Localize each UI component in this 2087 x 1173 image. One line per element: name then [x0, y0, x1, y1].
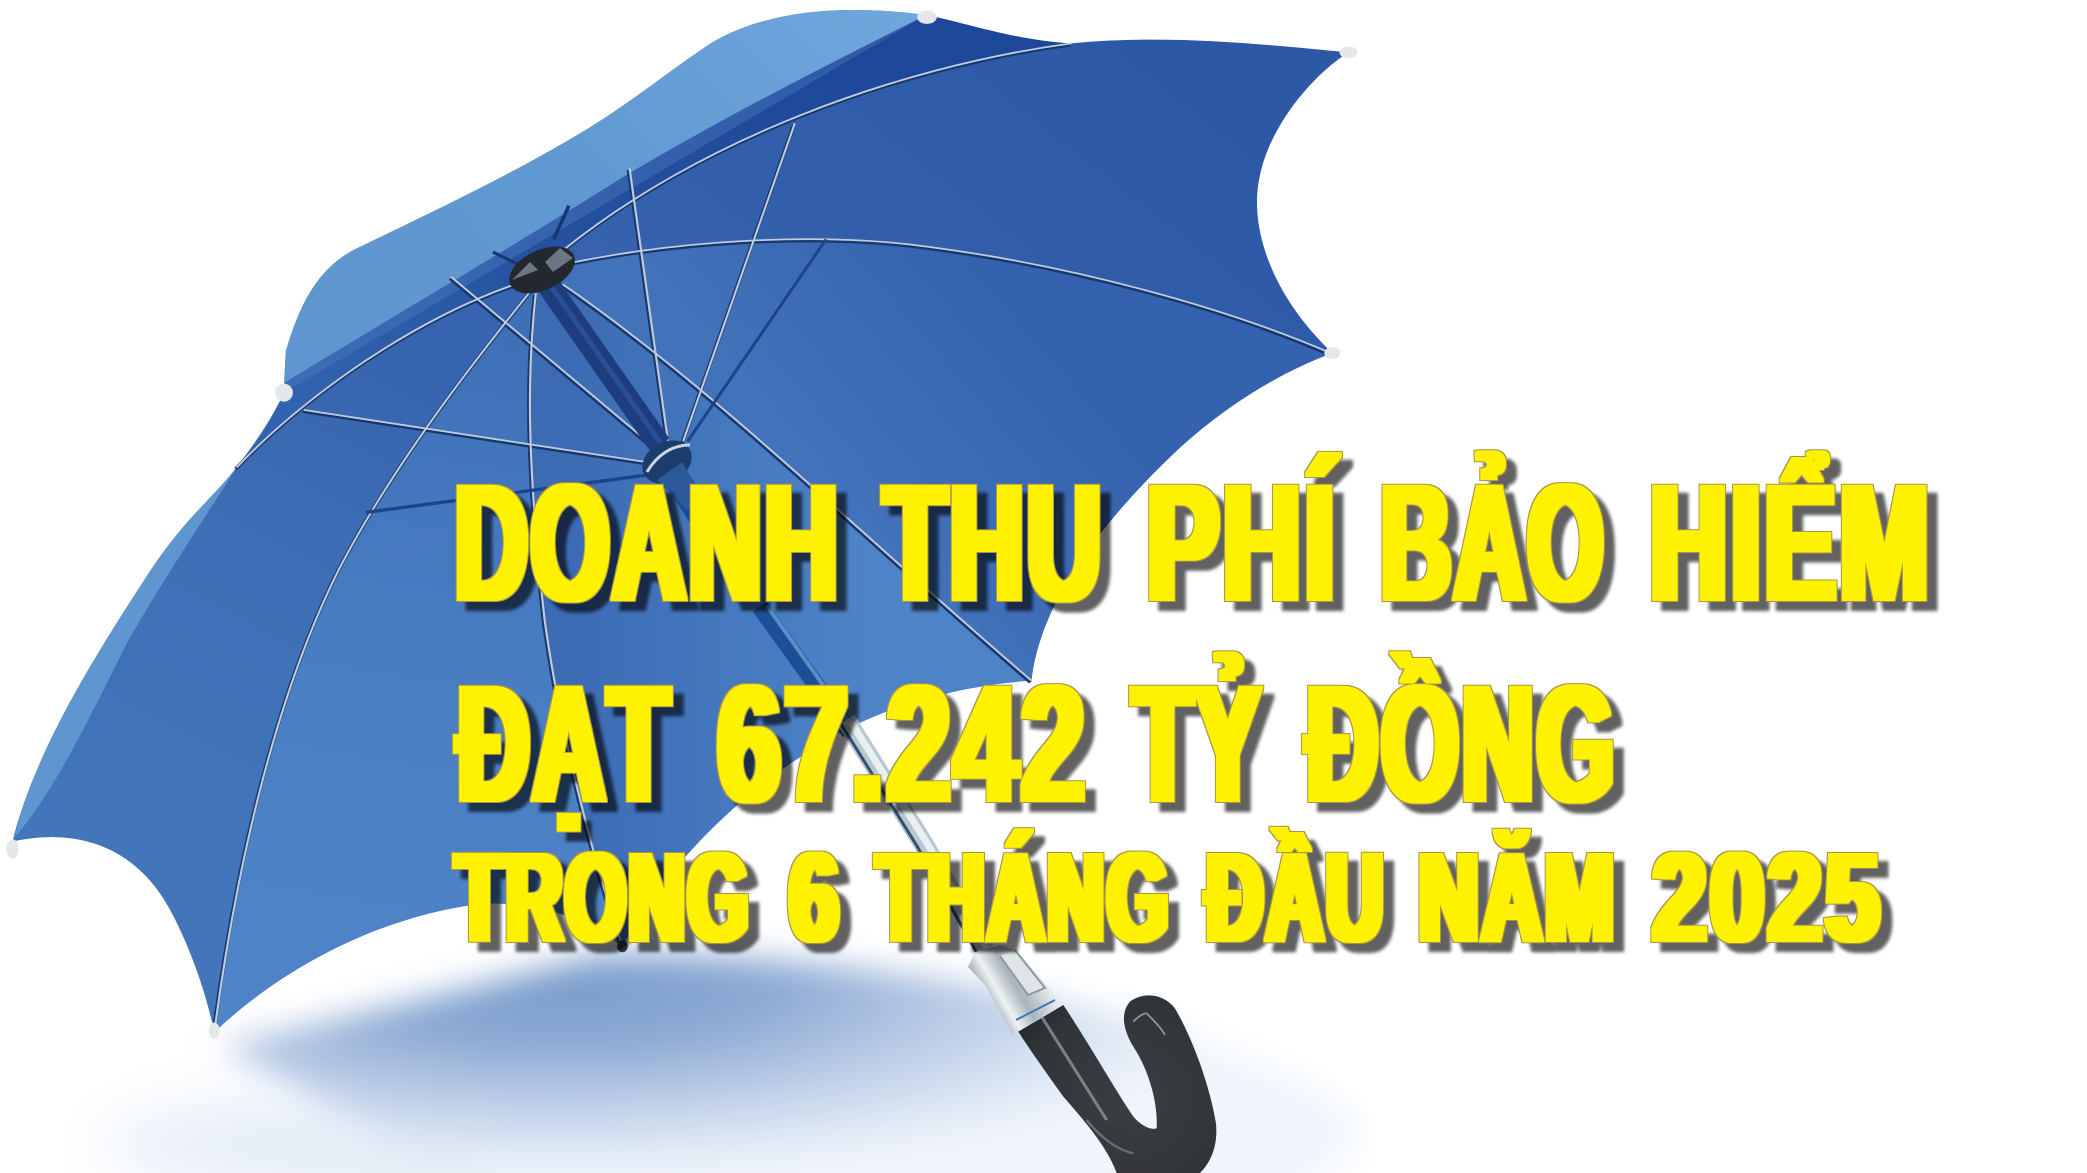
title line 2: ĐỒNG — [1306, 652, 1618, 837]
light outer fold — [284, 10, 926, 383]
hub — [502, 237, 582, 303]
title line 2 — [458, 652, 1618, 837]
shaft — [541, 275, 988, 955]
title line 3: TRONG — [456, 827, 752, 968]
canopy — [6, 10, 1357, 1039]
title line 3: THÁNG — [877, 827, 1172, 968]
silver ferrule — [968, 945, 1063, 1035]
title line 3: ĐẦU — [1206, 827, 1386, 968]
handle — [1018, 995, 1216, 1173]
dark inner band — [237, 15, 1072, 468]
title line 2: TỶ — [1133, 652, 1264, 837]
left light edge strip — [14, 468, 237, 838]
canopy body — [13, 10, 1348, 1032]
title — [455, 451, 1932, 968]
title line 2: ĐẠT — [458, 652, 672, 837]
tips — [6, 10, 1357, 1039]
title line 1: DOANH — [455, 451, 841, 636]
umbrella — [6, 10, 1357, 1173]
title line 3: NĂM — [1419, 827, 1618, 968]
title line 1 — [455, 451, 1932, 636]
title line 1: THU — [884, 451, 1104, 636]
title line 3: 2025 — [1653, 827, 1884, 968]
title line 3 — [456, 827, 1884, 968]
collar — [634, 432, 702, 510]
title line 3: 6 — [790, 827, 842, 968]
title line 1: PHÍ — [1147, 451, 1338, 636]
lower right panel — [558, 239, 1332, 681]
bottom centre panel — [530, 284, 1031, 946]
bottom left panel — [214, 288, 622, 1032]
title line 1: BẢO — [1381, 451, 1606, 636]
left panel — [13, 280, 533, 1032]
ground shadow — [100, 955, 1360, 1173]
ribs and stretchers — [213, 43, 1331, 1034]
title line 2: 67.242 — [718, 652, 1088, 837]
title line 1: HIỂM — [1650, 451, 1932, 636]
